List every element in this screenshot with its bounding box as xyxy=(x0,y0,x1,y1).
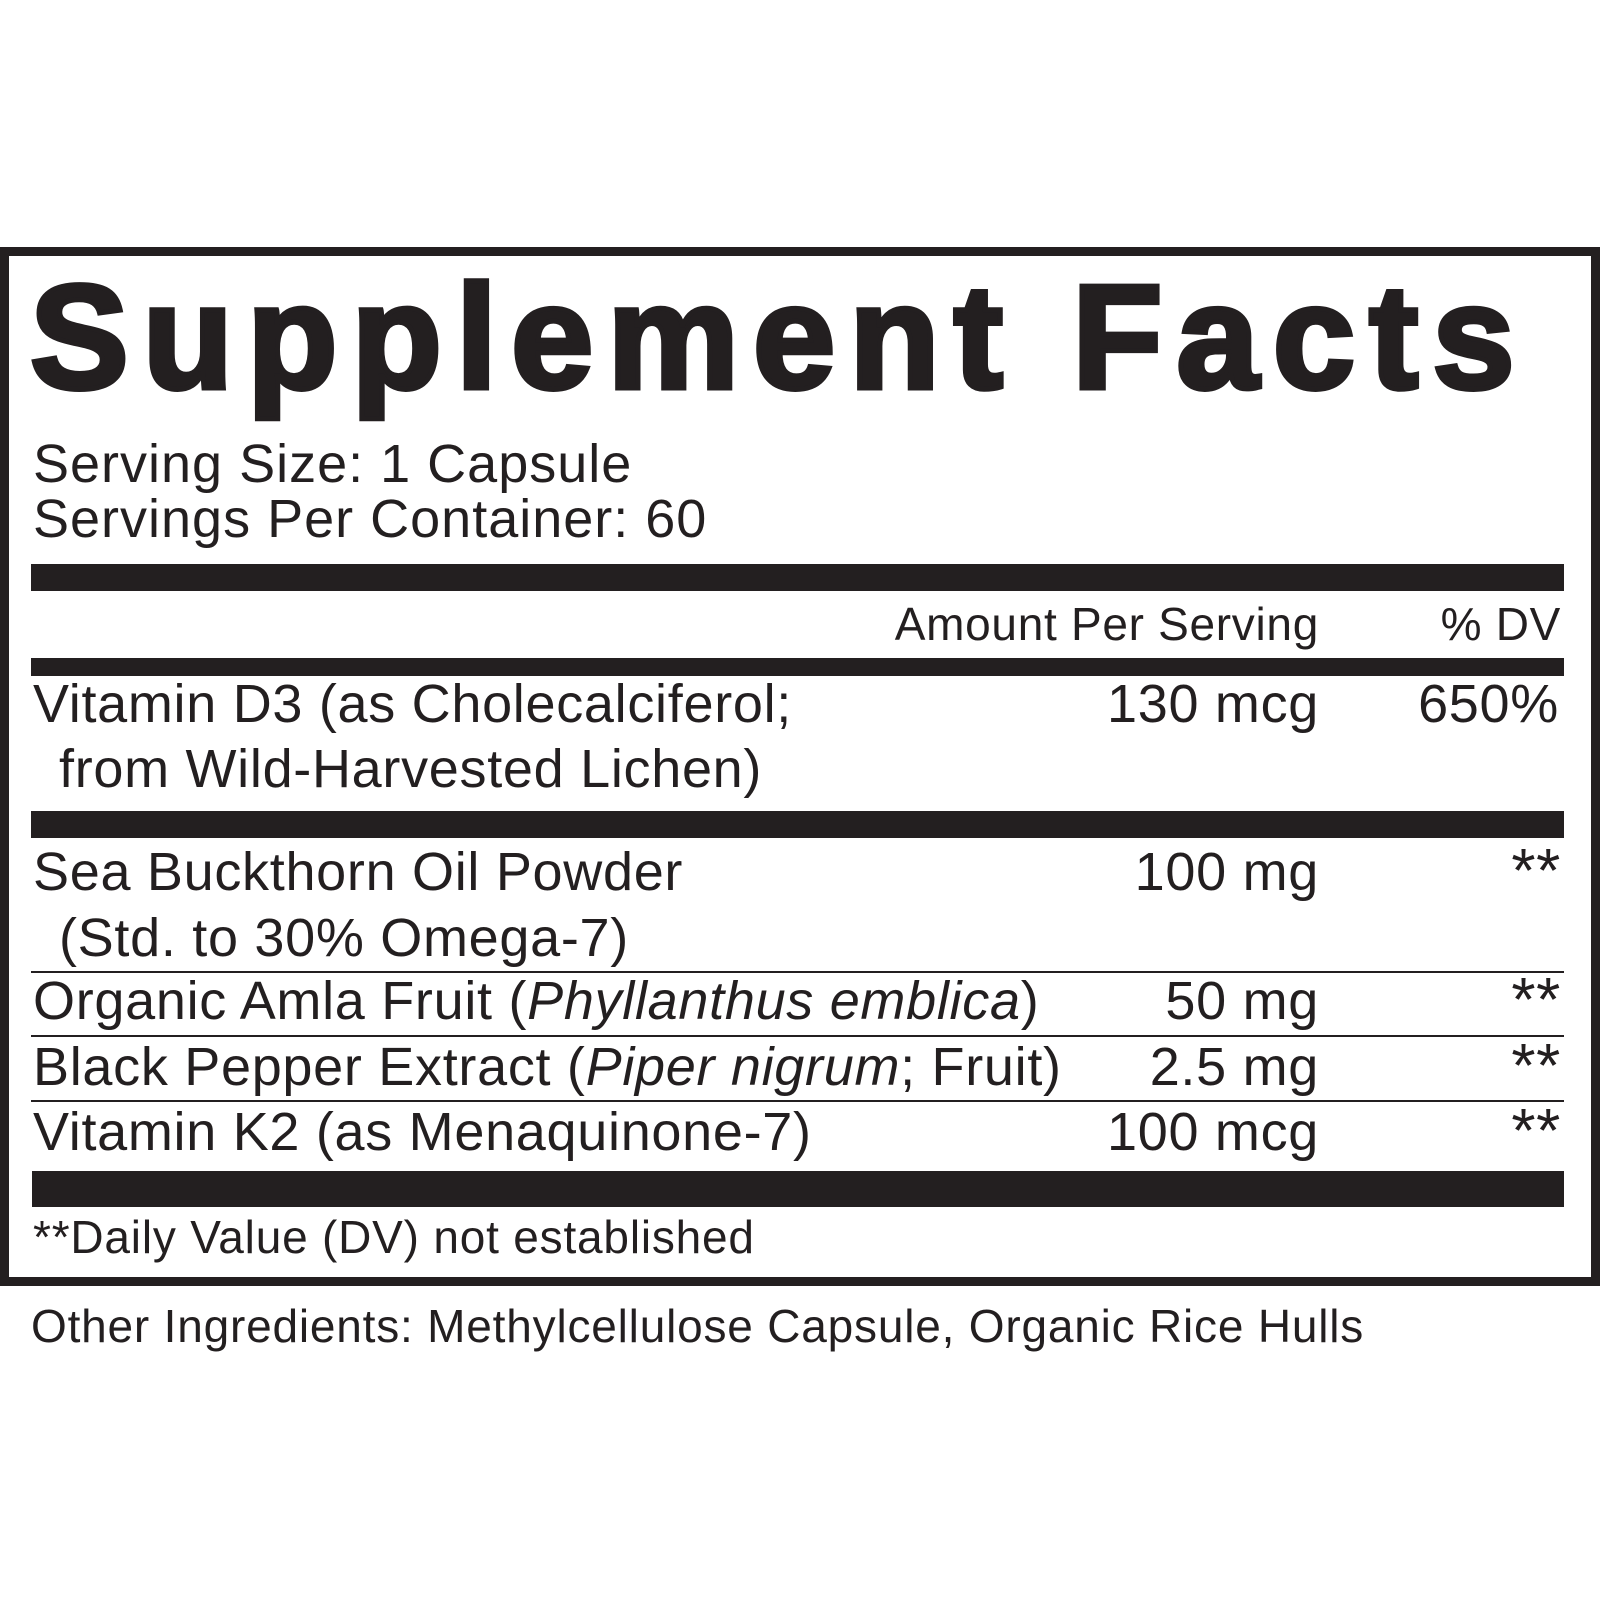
row: vitamin D3: 650% xyxy=(1418,674,1559,734)
serving info: Serving Size: 1 Capsule xyxy=(33,434,632,494)
row: sea buckthorn: Sea Buckthorn Oil Powder xyxy=(33,842,683,902)
column headers xyxy=(895,598,1561,650)
row: black pepper xyxy=(33,1032,1561,1101)
row: sea buckthorn: 100 mg xyxy=(1135,842,1319,902)
bar 4 xyxy=(32,1171,1564,1207)
row: vitamin D3: Vitamin D3 (as Cholecalciferol; xyxy=(33,674,792,734)
other ingredients: Other Ingredients: Methylcellulose Capsule, Organic Rice Hulls xyxy=(31,1300,1364,1352)
serving info: Servings Per Container: 60 xyxy=(33,489,707,549)
footnote: **Daily Value (DV) not established xyxy=(33,1211,755,1263)
bar 2 xyxy=(31,658,1564,676)
row: vitamin K2: Vitamin K2 (as Menaquinone-7) xyxy=(33,1102,812,1162)
row: vitamin D3: from Wild-Harvested Lichen) xyxy=(59,739,762,799)
bar 3 xyxy=(31,811,1564,838)
row: vitamin K2: ** xyxy=(1511,1097,1561,1166)
row: vitamin D3: 130 mcg xyxy=(1107,674,1319,734)
row: amla xyxy=(33,966,1561,1035)
row: sea buckthorn: ** xyxy=(1511,837,1561,906)
row: sea buckthorn: (Std. to 30% Omega-7) xyxy=(59,908,629,968)
panel: supplement facts box xyxy=(4,252,1596,1282)
row: black pepper: 2.5 mg xyxy=(1150,1037,1319,1097)
row: amla: ** xyxy=(1511,966,1561,1035)
column headers: % DV xyxy=(1441,598,1561,650)
column headers: Amount Per Serving xyxy=(895,598,1319,650)
title: Supplement Facts xyxy=(30,255,1529,420)
bar 1 xyxy=(31,564,1564,591)
row: vitamin D3 xyxy=(33,674,1559,799)
row: black pepper: Black Pepper Extract (Piper nigrum; Fruit) xyxy=(33,1037,1062,1097)
serving info xyxy=(33,434,707,549)
row: vitamin K2 xyxy=(33,1097,1561,1166)
row: black pepper: ** xyxy=(1511,1032,1561,1101)
row: amla: 50 mg xyxy=(1165,971,1319,1031)
row: amla: Organic Amla Fruit (Phyllanthus emblica) xyxy=(33,971,1039,1031)
row: sea buckthorn xyxy=(33,837,1561,968)
row: vitamin K2: 100 mcg xyxy=(1107,1102,1319,1162)
